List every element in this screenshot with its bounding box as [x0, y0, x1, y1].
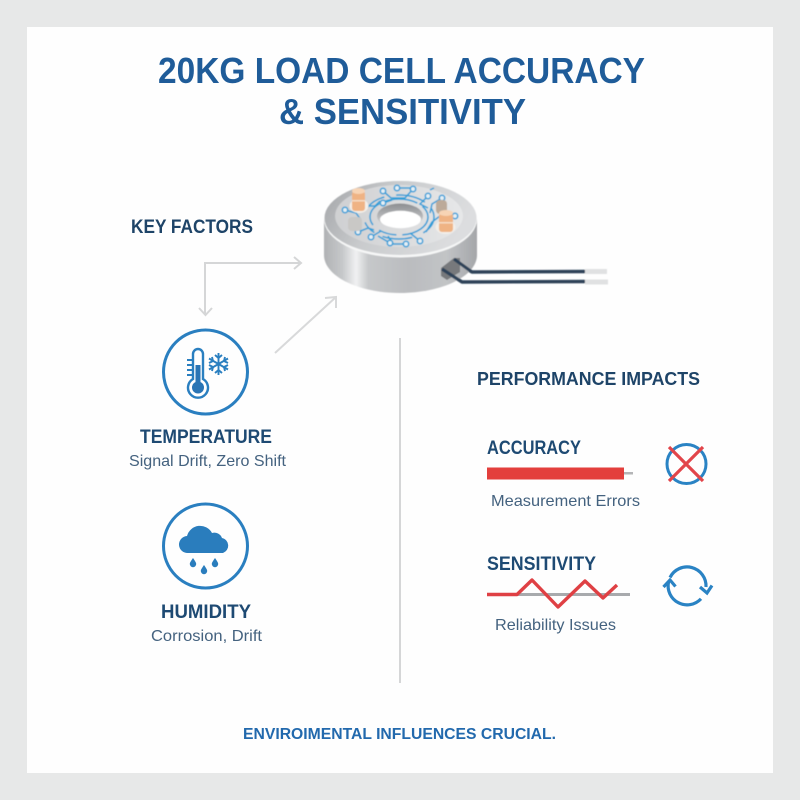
- text: temperature: TEMPERATURE: [140, 427, 272, 448]
- wires: [444, 262, 585, 282]
- text: humidity: Corrosion, Drift: [151, 628, 263, 645]
- components: [348, 217, 362, 231]
- heading: performance impacts: PERFORMANCE IMPACTS: [477, 368, 700, 389]
- sensitivity line chart: [487, 580, 630, 607]
- load cell illustration: [324, 180, 608, 293]
- icon: thermometer and snowflake: [164, 330, 248, 414]
- text: humidity: HUMIDITY: [161, 602, 251, 623]
- arrow: elbow from key factors: [199, 257, 301, 315]
- accuracy block: Measurement Errors: [491, 493, 640, 510]
- divider: [399, 338, 401, 683]
- heading: key factors: KEY FACTORS: [131, 217, 253, 238]
- wire tips: [585, 269, 607, 274]
- accuracy block: ACCURACY: [487, 438, 581, 459]
- title: 20KG LOAD CELL ACCURACY: [158, 50, 645, 91]
- icon: rain cloud: [164, 504, 248, 588]
- wire port: [441, 258, 460, 280]
- footer note: ENVIROIMENTAL INFLUENCES CRUCIAL.: [243, 726, 556, 743]
- circuit traces: [342, 185, 458, 247]
- icon: refresh arrows: [664, 567, 712, 605]
- icon: crossed circle: [667, 444, 706, 484]
- text: humidity: [151, 602, 263, 645]
- accuracy bar: [487, 468, 633, 480]
- title: & SENSITIVITY: [279, 91, 526, 132]
- center hole: [377, 204, 423, 228]
- accuracy block: [487, 438, 640, 510]
- sensitivity block: Reliability Issues: [495, 617, 616, 634]
- title: [158, 50, 645, 132]
- sensitivity block: [487, 554, 630, 634]
- text: temperature: [129, 427, 287, 470]
- arrow: diagonal to load cell: [275, 297, 336, 353]
- text: temperature: Signal Drift, Zero Shift: [129, 453, 287, 470]
- sensitivity block: SENSITIVITY: [487, 554, 596, 575]
